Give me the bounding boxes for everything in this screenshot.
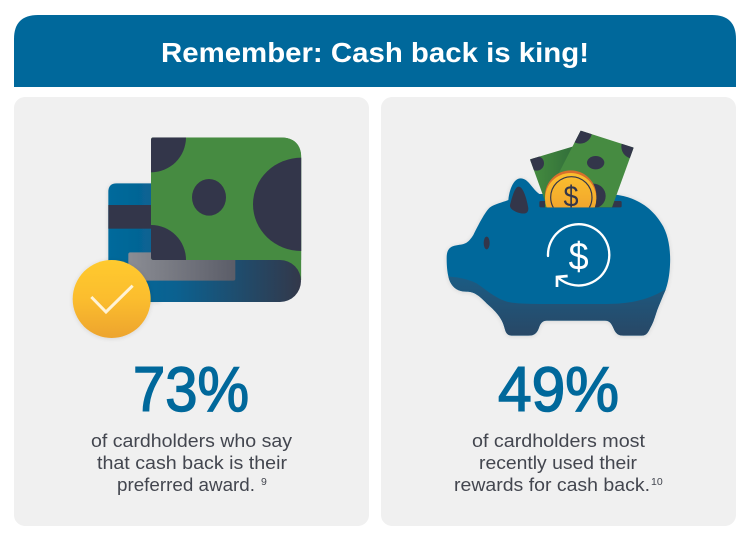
description: preferred award: preferred award. (117, 474, 255, 495)
banknote with dark spots (151, 137, 302, 260)
title: Remember: Cash back is king! (161, 37, 589, 68)
description: rewards for cash back: rewards for cash back. (454, 474, 650, 495)
banknote front (545, 130, 634, 208)
green banknote back (151, 137, 301, 281)
wallet tab (128, 252, 235, 281)
stat: 73%: 73% (133, 355, 249, 425)
description: preferred award: that cash back is their (97, 452, 287, 473)
icon: cash back cycle: $ (569, 234, 589, 278)
stat: 49%: 49% (498, 355, 619, 425)
panel: 73% preferred award (14, 97, 369, 526)
pig ear (510, 187, 528, 214)
description: rewards for cash back (454, 430, 663, 495)
description: rewards for cash back: recently used their (479, 452, 637, 473)
pig body (447, 178, 670, 336)
description: preferred award: of cardholders who say (91, 430, 293, 451)
gold coin: $ (563, 181, 578, 214)
description: rewards for cash back: of cardholders most (472, 430, 645, 451)
icon: piggy bank (440, 120, 670, 343)
description: preferred award (91, 430, 293, 495)
icon: yellow check badge (73, 260, 151, 338)
gold coin (545, 170, 596, 208)
panel: 49% used rewards (381, 97, 736, 526)
description: rewards for cash back: 10 (651, 476, 663, 488)
banknote back (530, 146, 572, 201)
header banner (14, 15, 736, 87)
coin slot (539, 201, 622, 207)
description: preferred award: 9 (261, 476, 267, 488)
pig belly shading (448, 276, 666, 336)
card behind the note (108, 183, 160, 302)
wallet band (108, 260, 301, 302)
pig eye (484, 237, 490, 249)
icon: wallet with cash and check (73, 102, 350, 338)
icon: cash back cycle (548, 224, 609, 287)
